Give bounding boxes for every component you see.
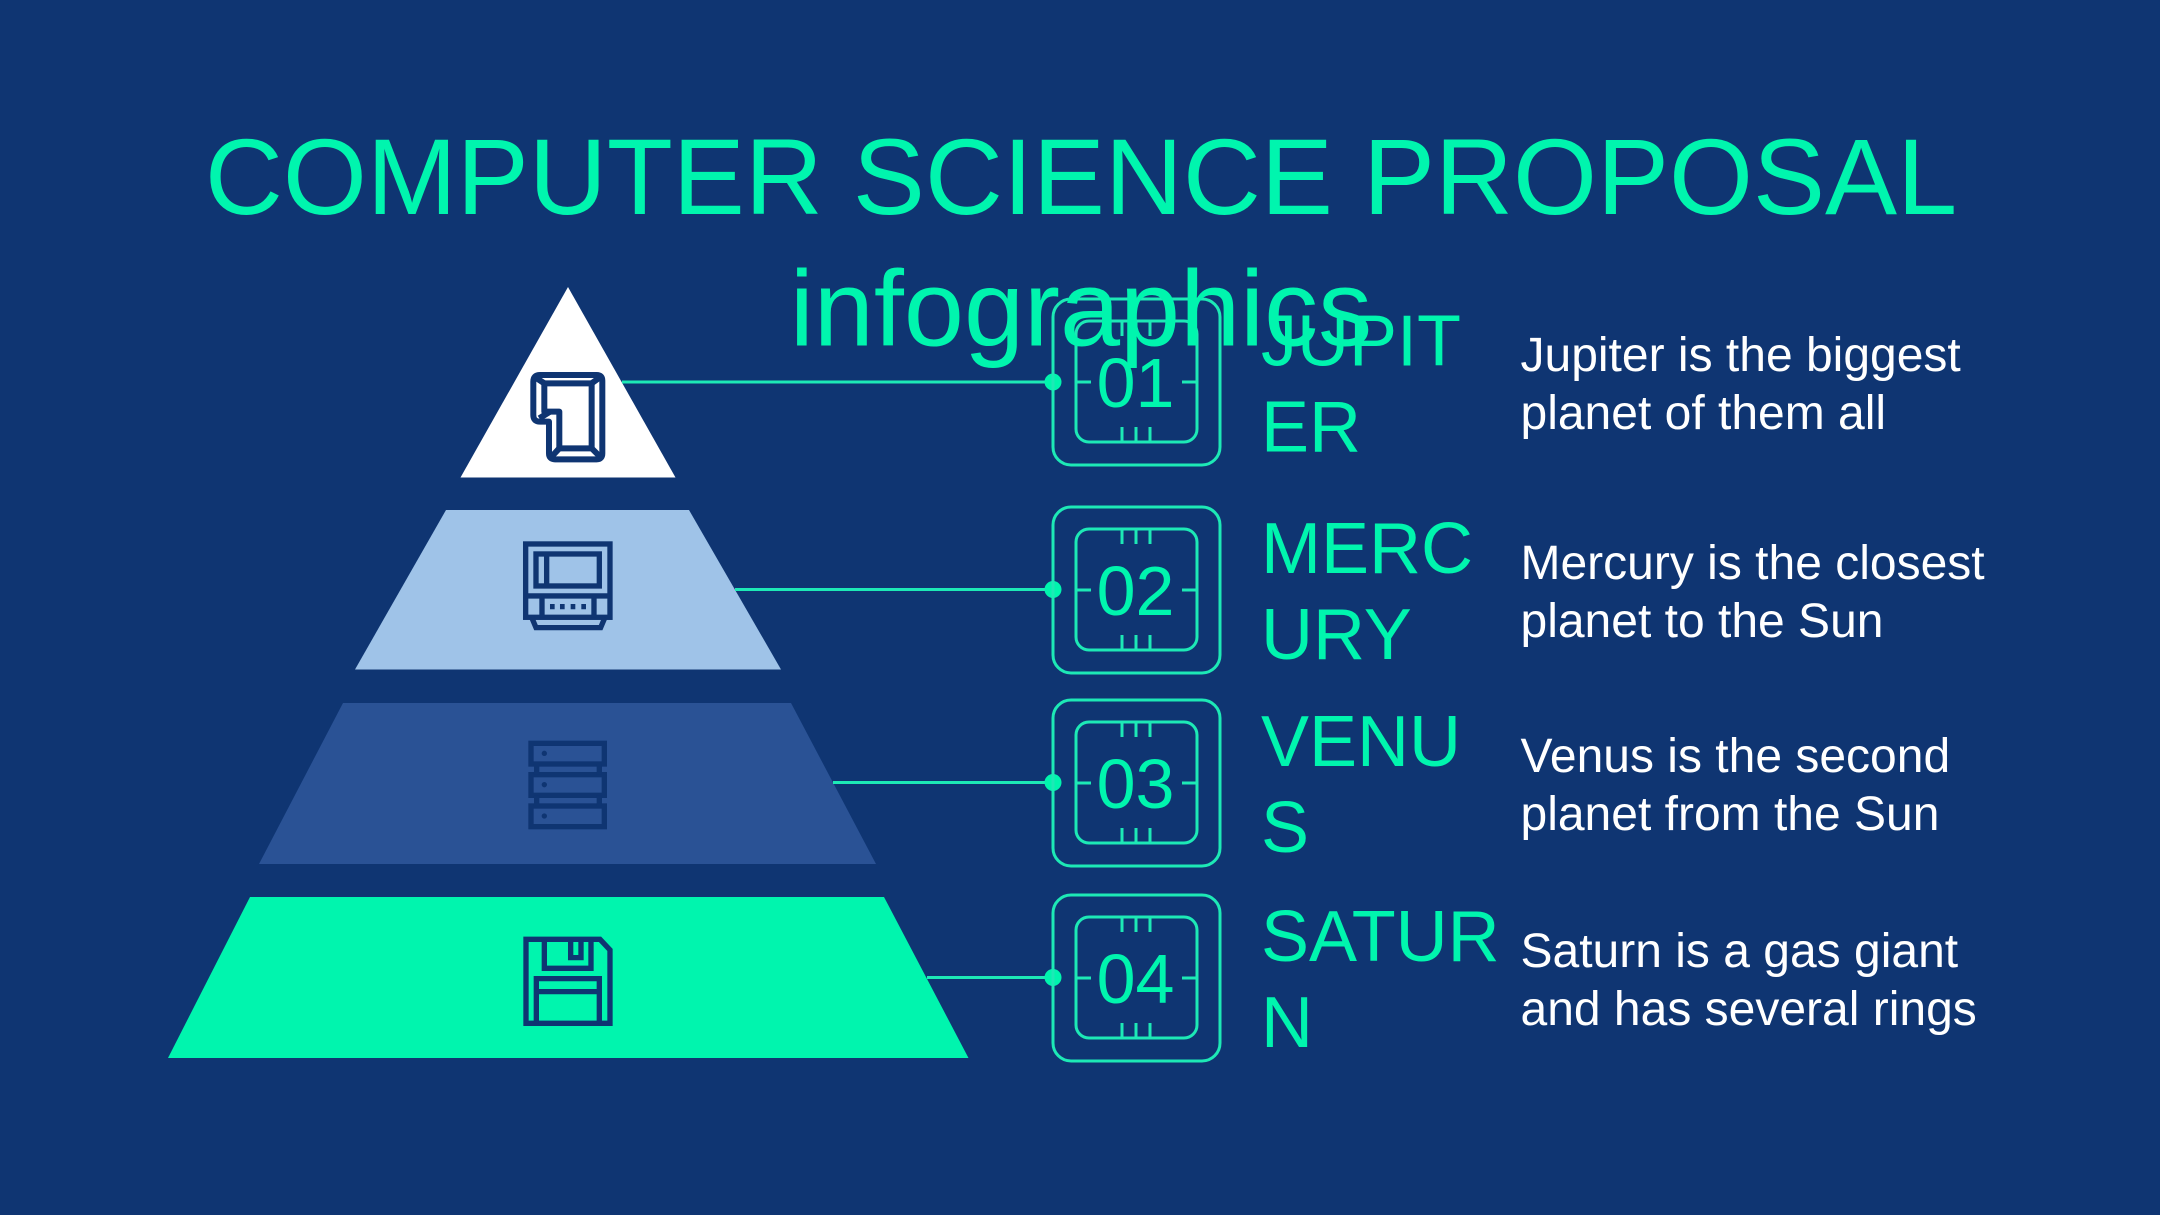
description: Venus: planet from the Sun [1520, 788, 1939, 841]
title [205, 116, 1957, 368]
pyramid tier 4: green [168, 897, 968, 1058]
label: Jupiter: JUPIT [1261, 302, 1461, 382]
description: Saturn: and has several rings [1520, 983, 1977, 1036]
pyramid tier 1: white triangle [460, 287, 676, 478]
number badge 02 [1053, 507, 1220, 673]
connector line 02 [735, 581, 1062, 598]
label: Mercury: URY [1261, 595, 1412, 675]
number badge 04 [1053, 895, 1220, 1061]
number badge 01: 01 [1097, 344, 1174, 422]
label: Jupiter [1261, 302, 1461, 468]
label: Venus: S [1261, 788, 1309, 868]
description: Venus: Venus is the second [1520, 730, 1950, 783]
connector line 04 [927, 969, 1062, 986]
title: COMPUTER SCIENCE PROPOSAL [205, 116, 1957, 237]
icon: CPU chip block [533, 375, 602, 459]
connector line 01 [622, 374, 1062, 390]
connector line 03 [833, 774, 1062, 791]
icon: floppy disk [526, 939, 610, 1023]
icon: computer terminal [526, 544, 610, 628]
label: Saturn [1261, 897, 1500, 1063]
label: Mercury [1261, 509, 1473, 675]
label: Saturn: N [1261, 983, 1313, 1063]
number badge 01 [1053, 299, 1220, 465]
description: Saturn [1520, 925, 1977, 1036]
description: Mercury: Mercury is the closest [1520, 537, 1985, 590]
description: Mercury [1520, 537, 1985, 648]
description: Venus [1520, 730, 1950, 841]
pyramid tier 3: mid blue [259, 703, 876, 864]
number badge 02: 02 [1097, 552, 1174, 630]
label: Jupiter: ER [1261, 388, 1361, 468]
title: infographics [790, 248, 1372, 368]
label: Venus: VENU [1261, 702, 1461, 782]
label: Mercury: MERC [1261, 509, 1473, 589]
description: Jupiter [1520, 329, 1961, 440]
number badge 03 [1053, 700, 1220, 866]
number badge 04: 04 [1097, 940, 1174, 1018]
label: Saturn: SATUR [1261, 897, 1500, 977]
description: Jupiter: planet of them all [1520, 387, 1886, 440]
pyramid tier 2: light blue [355, 510, 781, 670]
description: Mercury: planet to the Sun [1520, 595, 1883, 648]
description: Saturn: Saturn is a gas giant [1520, 925, 1958, 978]
description: Jupiter: Jupiter is the biggest [1520, 329, 1961, 382]
number badge 03: 03 [1097, 745, 1174, 823]
pyramid chart [168, 287, 968, 1058]
icon: server rack [531, 743, 604, 827]
label: Venus [1261, 702, 1461, 868]
